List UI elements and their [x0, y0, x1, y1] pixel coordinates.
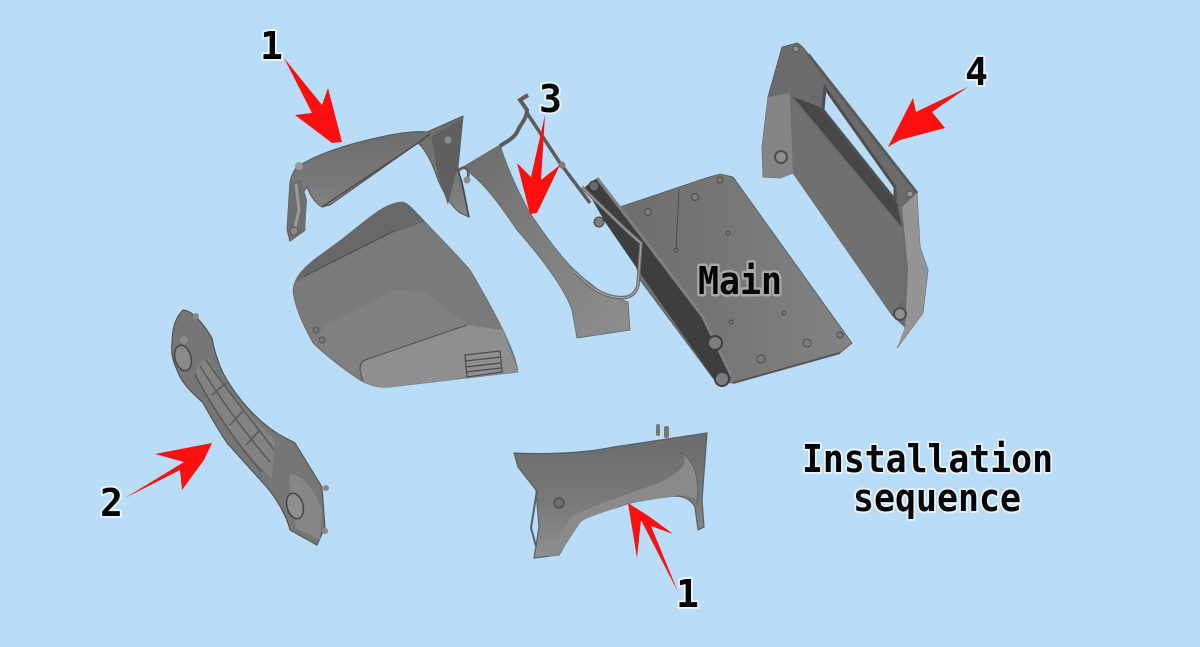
arrow: to rear panel: [888, 87, 968, 147]
number 2: 2: [100, 481, 123, 525]
number 3: 3: [539, 77, 562, 121]
arrow: to upper fender: [284, 58, 342, 143]
number 4: 4: [965, 50, 988, 94]
part: rear panel 4: [762, 43, 928, 348]
part: grille 2: [172, 310, 329, 545]
part: pillar 3 with wire frame: [458, 95, 641, 338]
heading: installation sequence: Installation: [802, 437, 1053, 481]
number 1 bottom: 1: [676, 572, 699, 616]
part: upper fender: [287, 116, 469, 241]
arrow: to grille: [125, 443, 212, 498]
label: main: Main: [698, 259, 782, 303]
part: hood: [293, 202, 518, 387]
number 1 top: 1: [260, 24, 283, 68]
arrow: to pillar: [517, 115, 560, 214]
heading: installation sequence: sequence: [853, 476, 1021, 520]
heading: installation sequence: [802, 437, 1053, 520]
arrow: to lower fender: [628, 503, 678, 592]
part: lower fender: [514, 424, 707, 558]
part: main base plate: [585, 174, 852, 386]
